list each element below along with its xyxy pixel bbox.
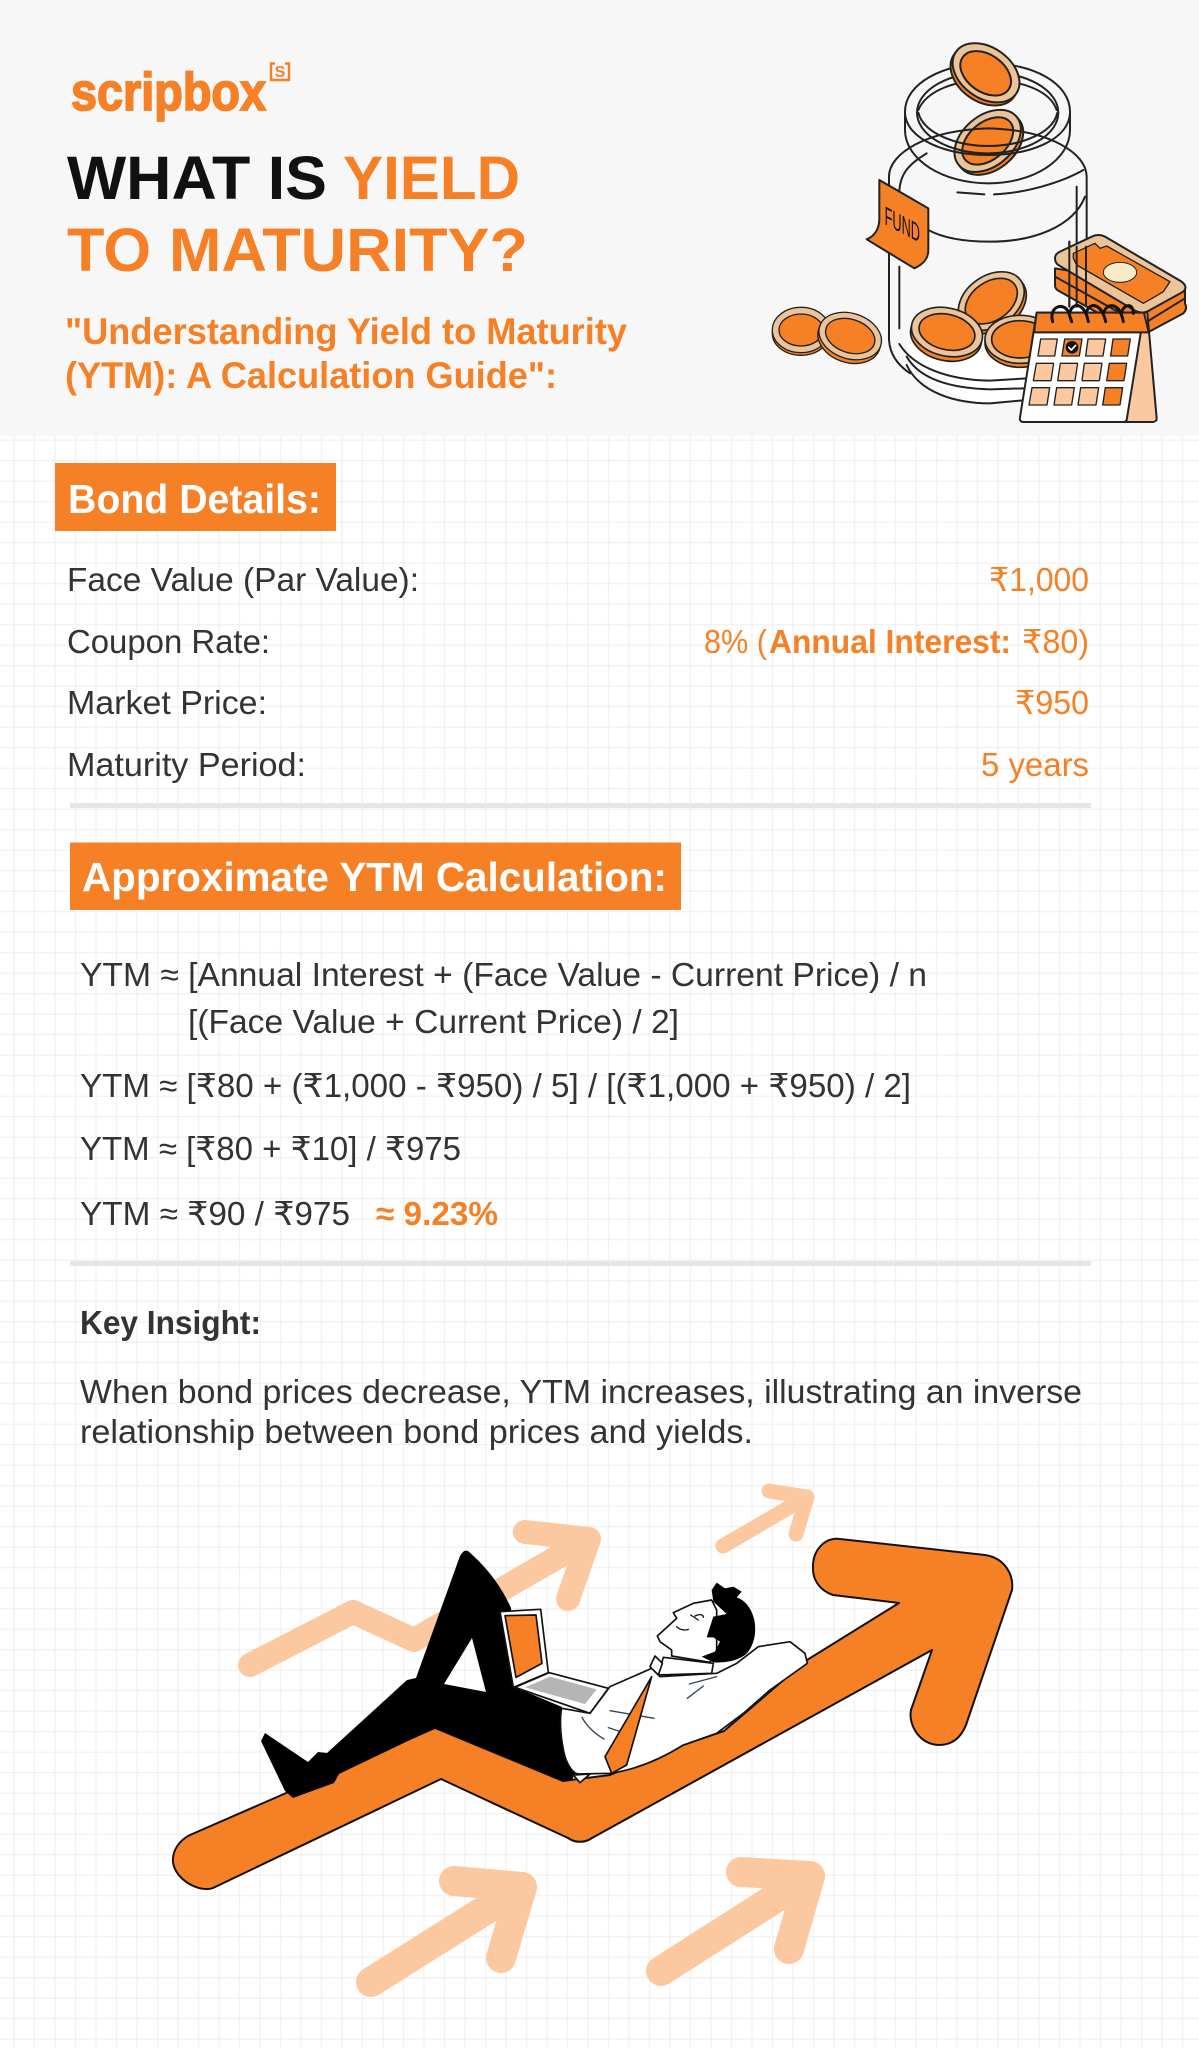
logo: scripbox: S <box>275 64 286 81</box>
panel: bond details <box>55 463 1089 783</box>
illustration: man relaxing on a rising arrow <box>173 1491 1012 1982</box>
icon: jar outline <box>889 63 1087 403</box>
formula: YTM ≈ [Annual Interest + (Face Value - Current Price) / n <box>80 956 927 993</box>
hair <box>702 1583 755 1663</box>
man: upper body, laptop and head <box>500 1583 807 1783</box>
heading: bond details: Bond Details: <box>68 476 321 522</box>
row: coupon rate: Coupon Rate: <box>67 623 270 660</box>
tie <box>605 1656 662 1773</box>
subtitle: "Understanding Yield to Maturity <box>65 311 627 352</box>
row: face value: Face Value (Par Value): <box>67 561 419 598</box>
arrow: small light top right <box>723 1491 807 1546</box>
title: WHAT IS <box>67 144 327 212</box>
icon: stack of banknotes <box>1055 235 1186 337</box>
header panel <box>0 0 1199 436</box>
arrow: main orange rising arrow <box>173 1539 1012 1889</box>
row: coupon rate: Annual Interest: <box>769 623 1011 660</box>
step: result: YTM ≈ ₹90 / ₹975 <box>80 1195 350 1232</box>
step: simplify: YTM ≈ [₹80 + ₹10] / ₹975 <box>80 1130 461 1167</box>
laptop <box>500 1609 608 1713</box>
icon: calendar rings <box>1052 306 1133 322</box>
row: maturity period <box>67 746 1089 783</box>
row: market price <box>67 684 1089 721</box>
heading: bond details <box>55 463 336 531</box>
icon: calendar <box>1020 306 1157 422</box>
icon: falling coin inside the jar <box>943 97 1035 188</box>
icon: fund label: FUND <box>885 201 920 248</box>
text block: insight <box>80 1373 1082 1450</box>
title: TO <box>67 216 151 284</box>
row: market price: ₹950 <box>1015 684 1089 721</box>
icon: coins at the bottom of the jar <box>905 260 1055 368</box>
icon: white jar base <box>907 345 1027 403</box>
arrow: light lower right <box>661 1872 810 1971</box>
arrow: light lower left <box>371 1881 522 1982</box>
row: coupon rate: 8% ( <box>704 623 767 660</box>
row: face value: ₹1,000 <box>989 561 1089 598</box>
face <box>657 1600 717 1662</box>
row: maturity period: 5 years <box>981 746 1089 783</box>
shirt <box>561 1642 807 1783</box>
step: substitute values: YTM ≈ [₹80 + (₹1,000 - ₹950) / 5] / [(₹1,000 + ₹950) / 2] <box>80 1067 911 1104</box>
icon: calendar day cells <box>1029 339 1130 405</box>
heading: approximate YTM calculation: Approximate YTM Calculation: <box>82 854 667 900</box>
subtitle: (YTM): A Calculation Guide": <box>65 355 557 396</box>
icon: top coin <box>939 31 1031 118</box>
panel: approximate YTM calculation <box>70 842 927 1232</box>
title: YIELD <box>343 144 520 212</box>
step: result: ≈ 9.23% <box>376 1195 498 1232</box>
logo: scripbox: scripbox <box>71 63 266 122</box>
man: black trousers and shoe <box>261 1551 575 1798</box>
row: market price: Market Price: <box>67 684 267 721</box>
step: result <box>80 1195 498 1232</box>
illustration: jar with coins, money and calendar <box>772 31 1186 422</box>
row: face value <box>67 561 1089 598</box>
heading: approximate YTM calculation <box>70 842 681 910</box>
panel: key insight <box>80 1304 1082 1450</box>
title <box>67 144 528 284</box>
row: maturity period: Maturity Period: <box>67 746 306 783</box>
arrow: light zigzag behind the man <box>250 1532 589 1665</box>
row: coupon rate <box>67 623 1089 660</box>
text block: insight: relationship between bond prices and yields. <box>80 1413 753 1450</box>
text block: insight: When bond prices decrease, YTM increases, illustrating an inverse <box>80 1373 1082 1410</box>
title: MATURITY? <box>169 216 528 284</box>
subtitle <box>65 311 627 396</box>
icon: fund label <box>867 180 928 268</box>
icon: coins beside the jar <box>772 305 888 371</box>
formula: [(Face Value + Current Price) / 2] <box>188 1003 679 1040</box>
heading: key insight: Key Insight: <box>80 1304 261 1341</box>
formula <box>80 956 927 1040</box>
row: coupon rate: ₹80) <box>1022 623 1089 660</box>
